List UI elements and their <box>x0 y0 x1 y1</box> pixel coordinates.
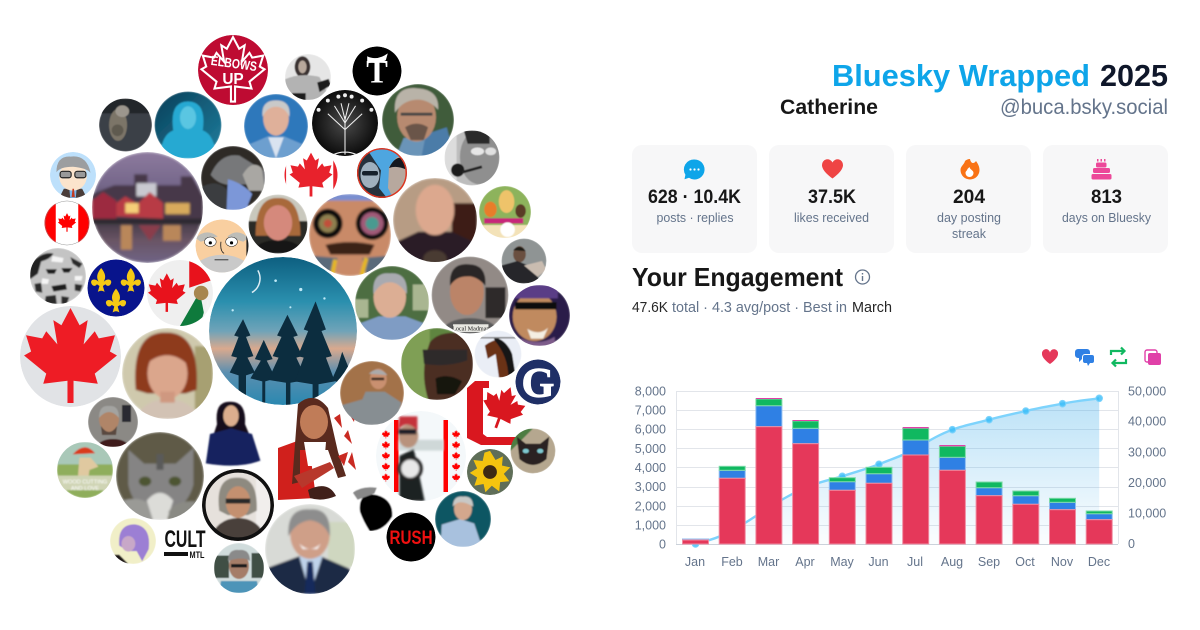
engagement summary: 47.6K <box>632 300 668 316</box>
avatar: local madman portrait <box>432 256 508 334</box>
value: 37.5K <box>808 187 856 208</box>
right axis labels: 50,000 <box>1128 384 1166 398</box>
avatar: dog on dark road <box>99 98 152 152</box>
avatar: man with tan wall <box>340 361 404 425</box>
panel: day posting streak <box>906 145 1031 253</box>
label: likes received <box>794 210 869 225</box>
avatar: white tree on black <box>312 90 378 156</box>
avatar: woman in navy blazer <box>206 402 260 466</box>
avatar: newspaper T logo: T <box>366 53 388 89</box>
left axis labels: 2,000 <box>635 500 666 514</box>
avatar: torn Canada flag <box>284 152 338 196</box>
month labels: Jul <box>907 555 923 569</box>
label: days on Bluesky <box>1062 210 1151 225</box>
cumulative area and line <box>692 395 1102 547</box>
avatar: horse on white <box>474 330 522 378</box>
icon: info <box>856 270 870 284</box>
avatar: big red maple leaf <box>20 306 121 407</box>
display name: Catherine <box>780 96 878 119</box>
avatar: G logo on navy: G <box>522 360 554 407</box>
avatar: hockey player <box>285 54 331 102</box>
avatar: newspaper T logo <box>352 46 402 96</box>
avatar: woman with auburn hair <box>248 194 308 254</box>
avatar: dog painting in red hat <box>57 442 113 498</box>
engagement summary <box>632 300 892 316</box>
avatar: black and white hair silhouette <box>348 483 396 531</box>
month labels <box>685 555 1110 569</box>
label <box>937 210 1001 241</box>
month labels: Jun <box>868 555 889 569</box>
avatar: cartoon with glasses <box>50 152 96 198</box>
left axis labels: 8,000 <box>635 384 666 398</box>
icon: cake <box>1092 159 1112 180</box>
engagement summary: March <box>852 300 892 316</box>
avatar: woman with red hair <box>122 328 213 419</box>
month labels: Dec <box>1088 555 1110 569</box>
avatar: smiling man with black glasses <box>509 285 570 346</box>
month labels: Nov <box>1051 555 1074 569</box>
icon: repost arrows <box>1111 348 1126 366</box>
month labels: Mar <box>758 555 779 569</box>
value: 628 · 10.4K <box>648 187 741 208</box>
avatar: woman with black ring <box>202 469 274 541</box>
label: day posting <box>937 210 1001 225</box>
right axis labels: 40,000 <box>1128 414 1166 428</box>
avatar: elbows up maple leaf <box>198 35 268 105</box>
avatar: bald cartoon man <box>196 220 249 272</box>
avatar: two faces with red ring <box>357 148 407 198</box>
handle: @buca.bsky.social <box>1000 96 1168 119</box>
avatar: dog painting in red hat: AND LOVE <box>71 486 99 492</box>
avatar: night forest with moon <box>209 257 357 405</box>
avatar: elbows up maple leaf: UP <box>222 71 244 88</box>
icon: likes heart <box>1042 349 1058 364</box>
avatar: bald man in dark shirt <box>393 178 477 267</box>
month labels: Feb <box>721 555 743 569</box>
avatar: Canada and Mexico flags <box>147 260 213 326</box>
icon: replies bubbles <box>1075 349 1094 366</box>
icon: speech bubble <box>684 159 705 179</box>
left axis labels <box>635 384 666 552</box>
avatar: man with pipe <box>444 129 500 186</box>
avatar: psychedelic monster <box>309 194 391 276</box>
heading: your engagement: Your Engagement <box>632 262 843 292</box>
right axis labels: 30,000 <box>1128 446 1166 460</box>
panel: likes received <box>769 145 894 253</box>
left axis labels: 7,000 <box>635 404 666 418</box>
engagement summary: total · 4.3 avg/post · Best in <box>672 300 847 316</box>
right axis labels: 0 <box>1128 537 1135 551</box>
month labels: Apr <box>795 555 815 569</box>
right axis labels: 20,000 <box>1128 476 1166 490</box>
avatar bubble cluster <box>20 35 570 594</box>
left axis labels: 6,000 <box>635 422 666 436</box>
avatar: black and white comic face <box>30 248 86 304</box>
avatar: woman with Canada flag stripes <box>376 411 466 501</box>
month labels: Oct <box>1015 555 1035 569</box>
right axis labels: 10,000 <box>1128 506 1166 520</box>
panel: days on Bluesky <box>1043 145 1168 253</box>
avatar: man in dark suit <box>265 504 355 594</box>
avatar: man in sunglasses <box>401 328 473 400</box>
avatar: man in home office <box>88 397 138 447</box>
avatar: siamese cat <box>510 428 556 474</box>
title: 2025 <box>1100 58 1168 93</box>
value: 204 <box>953 187 985 208</box>
avatar: Rush logo <box>386 512 436 562</box>
avatar: two sleeping cats <box>201 146 265 210</box>
avatar: smiling older man <box>355 266 429 340</box>
avatar: grey tabby cat <box>116 432 204 520</box>
left axis labels: 4,000 <box>635 461 666 475</box>
avatar: man against teal wall <box>435 491 491 547</box>
title: Bluesky Wrapped <box>832 58 1090 93</box>
left axis labels: 5,000 <box>635 442 666 456</box>
month labels: Jan <box>685 555 705 569</box>
avatar: man on grey couch <box>502 238 546 284</box>
avatar: dog painting in red hat: WOOD CUTTING <box>63 479 107 485</box>
avatar: blue hooded figure <box>154 92 222 158</box>
avatar: harbour town <box>92 152 203 263</box>
panel: posts and replies <box>632 145 757 253</box>
avatar: sunflower <box>467 449 513 495</box>
icon: flame <box>960 159 980 180</box>
avatar: illustrated woman with braids <box>278 398 356 500</box>
label: posts · replies <box>656 210 734 225</box>
avatar: local madman portrait: Local Madman <box>452 326 489 332</box>
month labels: May <box>830 555 855 569</box>
avatar: purple-haired woman <box>110 518 156 564</box>
grid <box>676 391 1118 544</box>
avatar: man on blue background <box>244 94 308 158</box>
right axis labels <box>1128 384 1166 551</box>
left axis labels: 3,000 <box>635 480 666 494</box>
avatar: older man with glasses <box>382 84 454 156</box>
month labels: Sep <box>978 555 1000 569</box>
avatar: fleur de lis <box>88 260 144 316</box>
avatar: man with sunglasses outdoors <box>214 543 264 593</box>
left axis labels: 0 <box>659 538 666 552</box>
month labels: Aug <box>941 555 963 569</box>
chart: monthly engagement stacked bars with cumulative line <box>635 384 1166 569</box>
avatar: elbows up maple leaf: ELBOWS <box>210 53 258 74</box>
legend icons <box>1042 348 1161 366</box>
icon: quote squares <box>1145 350 1161 365</box>
icon: heart <box>822 159 843 178</box>
avatar: Rush logo: RUSH <box>389 527 433 549</box>
label: streak <box>952 226 986 241</box>
logo: CULT MTL: MTL <box>190 550 205 560</box>
avatar: cartoon band <box>479 186 531 238</box>
avatar: Canada flag round <box>44 200 90 246</box>
logo: CULT MTL <box>164 526 206 560</box>
logo: CULT MTL: CULT <box>164 526 206 553</box>
avatar: Canadian C with maple leaf <box>467 380 530 445</box>
value: 813 <box>1091 187 1122 208</box>
left axis labels: 1,000 <box>635 518 666 532</box>
stacked bars <box>682 398 1112 544</box>
